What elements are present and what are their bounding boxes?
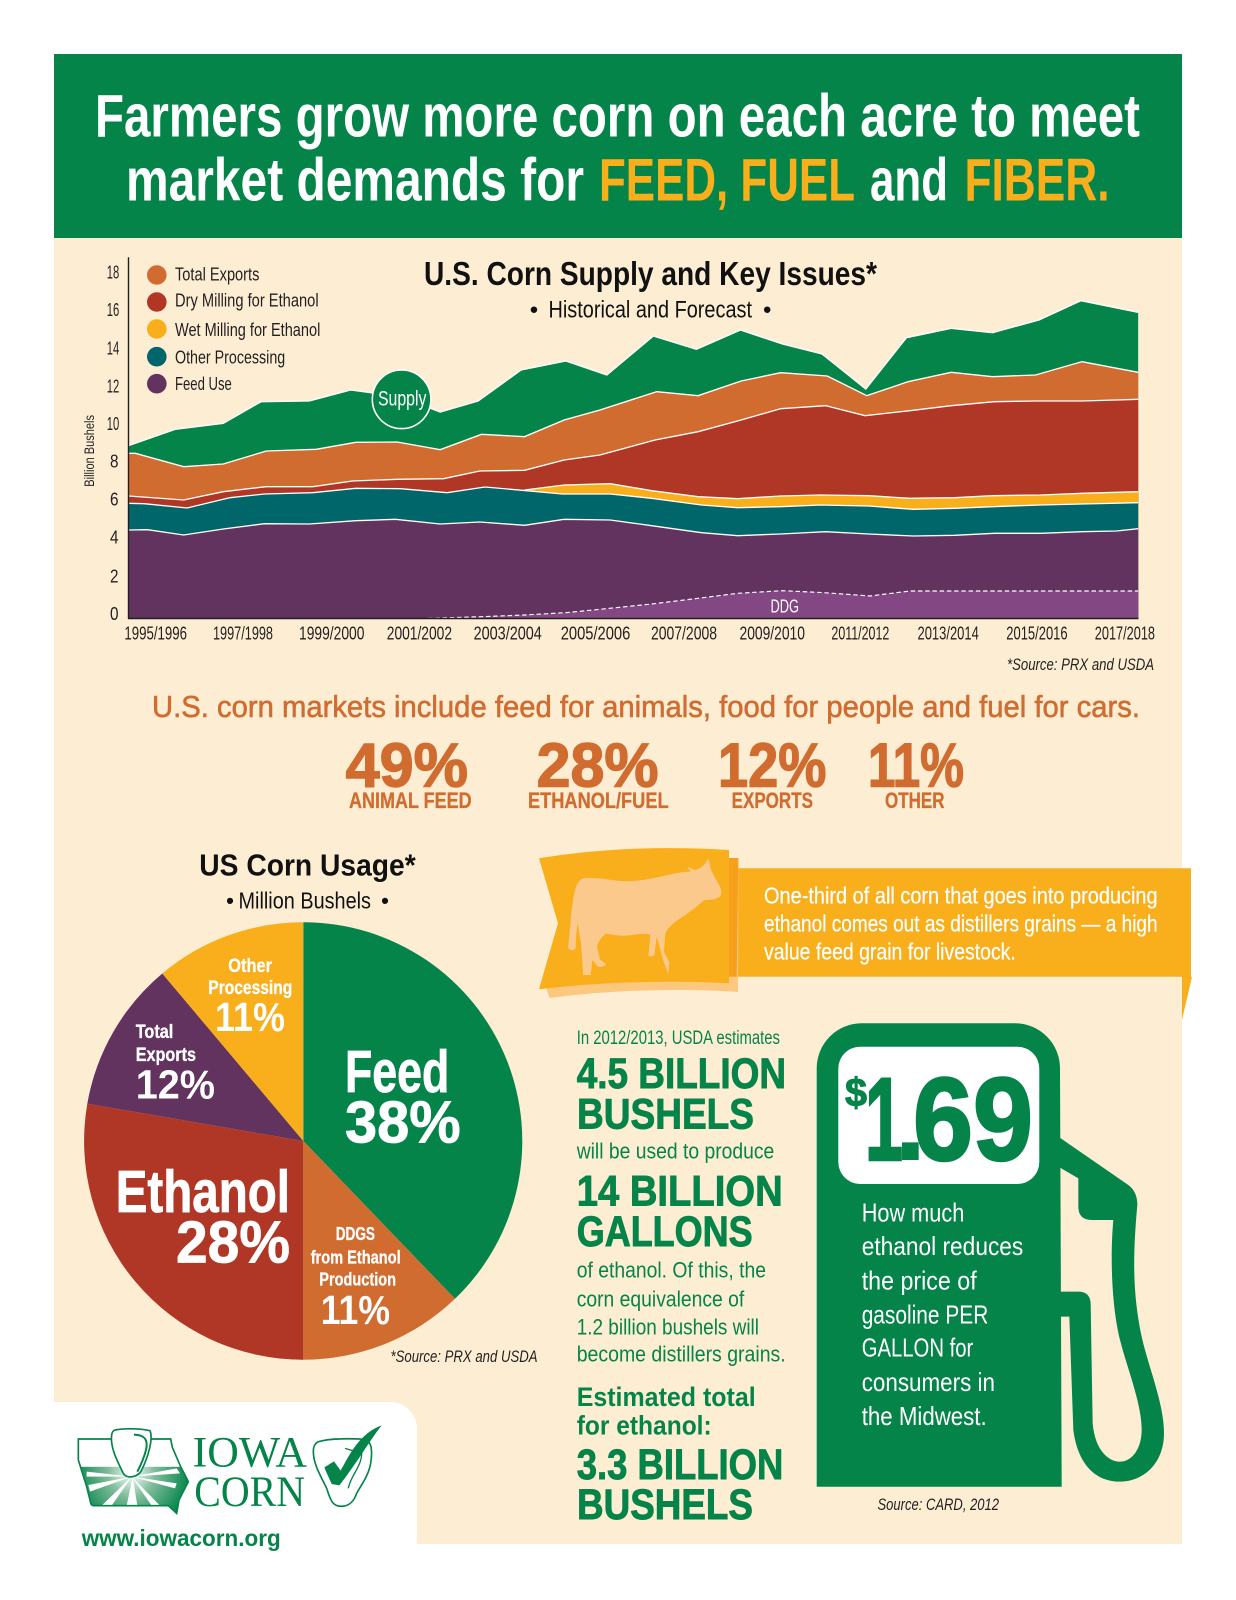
callout text: One-third of all corn that goes into producing bbox=[764, 882, 1158, 908]
legend: Wet Milling for Ethanol bbox=[175, 320, 320, 340]
icon: corn kernel with check mark bbox=[313, 1425, 382, 1506]
text block: ethanol statistics: 4.5 BILLION bbox=[577, 1050, 786, 1098]
title banner: FIBER. bbox=[964, 147, 1110, 214]
text block: ethanol statistics: 1.2 billion bushels will bbox=[577, 1314, 759, 1340]
supply badge bbox=[372, 370, 431, 429]
y axis labels: 12 bbox=[107, 376, 119, 396]
label: total exports: Exports bbox=[136, 1045, 196, 1066]
label: ethanol bbox=[116, 1159, 290, 1276]
label: DDGS bbox=[311, 1224, 401, 1333]
label: total exports: Total bbox=[136, 1022, 173, 1043]
y axis labels: 18 bbox=[107, 262, 119, 282]
axes bbox=[128, 257, 1138, 619]
pump text: consumers in bbox=[862, 1367, 995, 1397]
pie chart: US corn usage bbox=[84, 848, 538, 1366]
pump source: Source: CARD, 2012 bbox=[878, 1495, 999, 1514]
label: ethanol: Ethanol bbox=[116, 1159, 290, 1225]
label: feed: Feed bbox=[345, 1039, 449, 1105]
label: other processing: Processing bbox=[208, 978, 292, 999]
y axis labels: 10 bbox=[107, 414, 119, 434]
ribbon band bbox=[737, 868, 1192, 1020]
callout text: value feed grain for livestock. bbox=[764, 938, 1016, 964]
stat: other: 11% bbox=[868, 732, 964, 800]
text block: ethanol statistics: GALLONS bbox=[577, 1208, 753, 1256]
legend: Dry Milling for Ethanol bbox=[175, 291, 319, 311]
text block: ethanol statistics bbox=[576, 1028, 786, 1529]
label: DDGS: Production bbox=[319, 1270, 396, 1290]
pie subheading: • bbox=[226, 888, 234, 914]
heading: U.S. corn markets: U.S. corn markets include feed for animals, food for people and fuel for cars. bbox=[152, 689, 1140, 724]
title banner: market demands for bbox=[126, 147, 584, 214]
pump text bbox=[862, 1198, 1023, 1431]
label: ethanol: 28% bbox=[176, 1210, 290, 1276]
text block: ethanol statistics: 3.3 BILLION bbox=[577, 1441, 783, 1489]
chart heading: U.S. Corn Supply and Key Issues* bbox=[424, 255, 877, 292]
text block: ethanol statistics: become distillers grains. bbox=[577, 1342, 786, 1367]
x axis labels: 2003/2004 bbox=[474, 623, 542, 643]
title banner: FEED, FUEL bbox=[599, 147, 855, 214]
pie heading: US Corn Usage* bbox=[199, 848, 417, 882]
text block: ethanol statistics: In 2012/2013, USDA estimates bbox=[577, 1028, 780, 1049]
area chart: U.S. corn supply and key issues bbox=[81, 255, 1155, 674]
market share statistics bbox=[346, 732, 964, 813]
text block: ethanol statistics: BUSHELS bbox=[577, 1481, 753, 1529]
logo panel bbox=[54, 1402, 417, 1551]
chart subheading: • bbox=[763, 296, 771, 323]
x axis labels: 2009/2010 bbox=[740, 623, 805, 643]
flag bbox=[539, 848, 729, 989]
y axis labels bbox=[107, 262, 119, 624]
x axis labels: 2005/2006 bbox=[561, 623, 630, 643]
y axis labels: 8 bbox=[110, 452, 118, 472]
icon: cow bbox=[568, 858, 721, 975]
label: DDGS: from Ethanol bbox=[311, 1248, 401, 1268]
label: feed: 38% bbox=[345, 1090, 461, 1156]
price display: 69 bbox=[913, 1054, 1033, 1186]
stat: ethanol/fuel: 28% bbox=[537, 732, 659, 800]
flag shadow bbox=[545, 858, 738, 998]
price display: . bbox=[894, 1054, 927, 1186]
stat: other bbox=[868, 732, 964, 813]
callout text: ethanol comes out as distillers grains — a high bbox=[764, 911, 1158, 937]
stat: exports: EXPORTS bbox=[732, 788, 813, 813]
x axis labels bbox=[124, 623, 1155, 643]
x axis labels: 1995/1996 bbox=[124, 623, 187, 643]
y axis labels: 6 bbox=[110, 490, 118, 510]
y axis labels: 16 bbox=[107, 300, 119, 320]
pump hose and nozzle bbox=[1058, 1137, 1164, 1482]
x axis labels: 2015/2016 bbox=[1006, 623, 1068, 643]
stat: animal feed: 49% bbox=[346, 732, 468, 800]
label: other processing: 11% bbox=[215, 994, 285, 1040]
y axis labels: 14 bbox=[107, 338, 119, 358]
y axis labels: 4 bbox=[110, 527, 118, 547]
price display: $ bbox=[845, 1071, 867, 1115]
pie subheading: • bbox=[381, 888, 389, 914]
icon: Iowa state with sun rays bbox=[77, 1429, 190, 1517]
pie slices bbox=[84, 922, 522, 1360]
chart subheading: • bbox=[530, 296, 538, 323]
x axis labels: 1997/1998 bbox=[213, 623, 273, 643]
y axis labels: 0 bbox=[110, 604, 118, 624]
y axis labels: 2 bbox=[110, 566, 118, 586]
price display: 1 bbox=[865, 1054, 903, 1186]
pie subheading: Million Bushels bbox=[238, 888, 371, 914]
legend: Feed Use bbox=[175, 374, 232, 394]
x axis labels: 2011/2012 bbox=[831, 623, 889, 643]
chart subheading: Historical and Forecast bbox=[548, 296, 752, 323]
x axis labels: 2013/2014 bbox=[918, 623, 979, 643]
callout text bbox=[764, 882, 1158, 964]
x axis labels: 2007/2008 bbox=[651, 623, 717, 643]
pump body bbox=[817, 1023, 1062, 1487]
x axis labels: 1999/2000 bbox=[299, 623, 364, 643]
pump text: ethanol reduces bbox=[862, 1231, 1023, 1261]
text block: ethanol statistics: BUSHELS bbox=[577, 1090, 754, 1138]
pump text: gasoline PER bbox=[862, 1299, 988, 1329]
cream background panel bbox=[54, 238, 1182, 1544]
chart source: *Source: PRX and USDA bbox=[1007, 655, 1154, 674]
x axis labels: 2001/2002 bbox=[387, 623, 452, 643]
text block: ethanol statistics: for ethanol: bbox=[577, 1410, 712, 1440]
y axis title: Billion Bushels bbox=[81, 415, 97, 487]
text block: ethanol statistics: will be used to produce bbox=[576, 1139, 774, 1164]
logo: Iowa Corn: CORN bbox=[194, 1469, 305, 1516]
stat: other: OTHER bbox=[885, 788, 945, 813]
label: DDGS: DDGS bbox=[336, 1224, 375, 1244]
pump text: the price of bbox=[862, 1265, 977, 1295]
label: total exports bbox=[136, 1022, 215, 1108]
text block: ethanol statistics: of ethanol. Of this, the bbox=[577, 1258, 766, 1283]
logo: Iowa Corn bbox=[77, 1425, 382, 1517]
stacked areas bbox=[129, 301, 1138, 618]
legend: Other Processing bbox=[175, 347, 285, 367]
text block: ethanol statistics: 14 BILLION bbox=[577, 1167, 783, 1215]
DDG label: DDG bbox=[770, 597, 799, 617]
logo wordmark: IOWA bbox=[193, 1430, 307, 1477]
x axis labels: 2017/2018 bbox=[1095, 623, 1155, 643]
legend bbox=[147, 265, 320, 394]
gas pump graphic bbox=[817, 1023, 1164, 1514]
stat: animal feed: ANIMAL FEED bbox=[349, 788, 472, 813]
ribbon callout: distillers grains bbox=[539, 848, 1192, 1020]
label: feed bbox=[345, 1039, 461, 1156]
supply badge: Supply bbox=[378, 388, 427, 411]
label: other processing bbox=[208, 956, 292, 1040]
pump text: GALLON for bbox=[862, 1333, 974, 1363]
title banner: and bbox=[870, 147, 948, 214]
text block: ethanol statistics: corn equivalence of bbox=[577, 1286, 745, 1312]
title banner bbox=[54, 54, 1182, 238]
stat: ethanol/fuel: ETHANOL/FUEL bbox=[528, 788, 669, 813]
label: other processing: Other bbox=[228, 956, 273, 977]
pump text: How much bbox=[862, 1198, 964, 1228]
pie source: *Source: PRX and USDA bbox=[390, 1347, 538, 1366]
legend: Total Exports bbox=[175, 265, 259, 285]
label: total exports: 12% bbox=[136, 1062, 215, 1108]
website url: www.iowacorn.org bbox=[81, 1525, 281, 1551]
label: DDGS: 11% bbox=[321, 1287, 390, 1333]
pump text: the Midwest. bbox=[862, 1401, 987, 1431]
text block: ethanol statistics: Estimated total bbox=[577, 1382, 756, 1412]
price display bbox=[838, 1047, 1039, 1186]
stat: exports: 12% bbox=[718, 732, 826, 800]
